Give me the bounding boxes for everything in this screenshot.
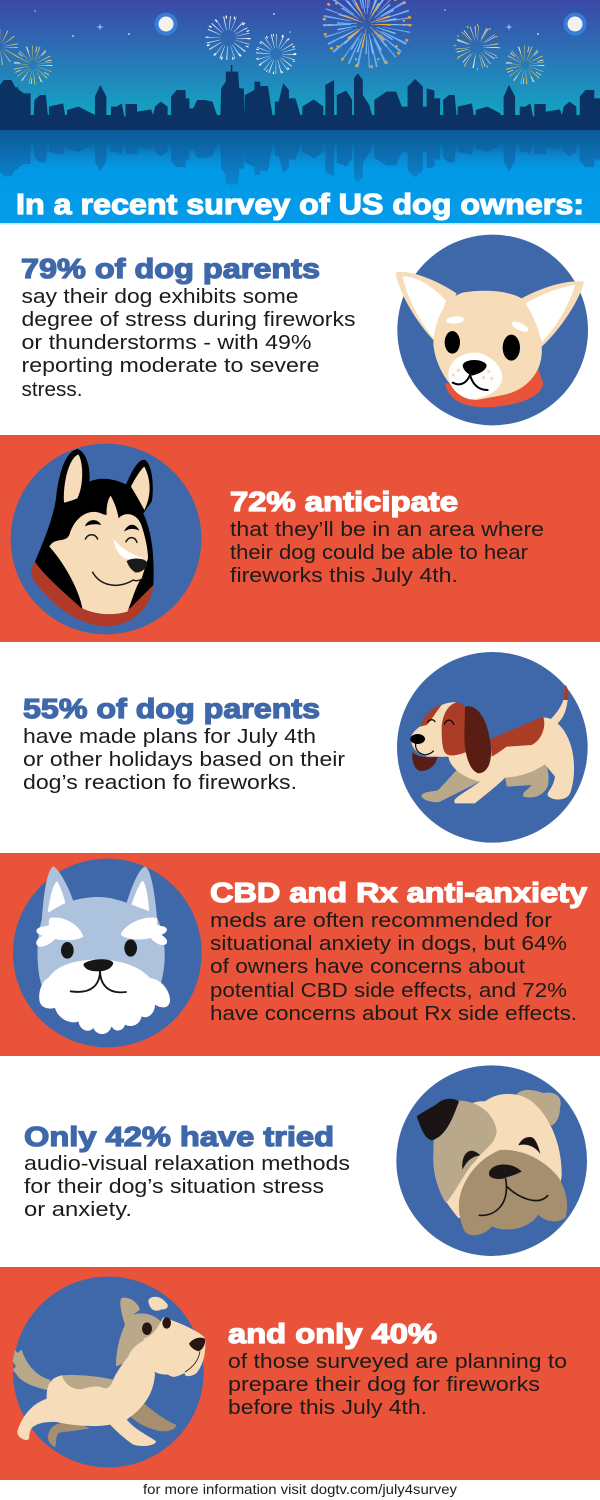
body text: or other holidays based on their (23, 748, 345, 771)
icon: beagle in circle (397, 652, 588, 843)
body text: or thunderstorms - with 49% (22, 331, 312, 354)
icon: husky in circle (11, 444, 201, 634)
icon: pug in circle (396, 1065, 587, 1256)
body text: potential CBD side effects, and 72% (210, 979, 567, 1002)
body text (210, 909, 577, 1025)
body text: before this July 4th. (228, 1396, 427, 1419)
body text: of those surveyed are planning to (228, 1350, 567, 1373)
firework: white one (207, 17, 249, 59)
body text: stress. (22, 378, 82, 401)
stat heading: and only 40% (228, 1318, 437, 1349)
panel: 55 percent plans (0, 642, 600, 853)
body text (23, 725, 345, 794)
body text: reporting moderate to severe (22, 354, 320, 377)
icon: schnauzer in circle (13, 859, 202, 1047)
body text: say their dog exhibits some (22, 285, 298, 308)
skyline reflection (0, 130, 600, 190)
panel: only 42 percent (0, 1056, 600, 1267)
panel: only 40 percent (0, 1267, 600, 1480)
skyline (0, 65, 600, 130)
firework: gold edge (0, 36, 11, 58)
stat heading: CBD and Rx anti-anxiety (210, 877, 587, 908)
body text (24, 1152, 350, 1221)
body text: have concerns about Rx side effects. (210, 1002, 577, 1025)
main title: In a recent survey of US dog owners: (16, 189, 584, 221)
icon: chihuahua in circle (396, 235, 588, 425)
body text: dog’s reaction fo fireworks. (23, 771, 297, 794)
panel: 72 percent anticipate (0, 435, 600, 642)
body text (230, 518, 544, 587)
body text: prepare their dog for fireworks (228, 1373, 540, 1396)
firework: large blue (324, 0, 410, 67)
body text: fireworks this July 4th. (230, 564, 458, 587)
firework: gold right (509, 49, 541, 81)
firework: gold and white (455, 25, 499, 69)
body text (22, 285, 356, 401)
firework: white two (257, 35, 295, 73)
panel: 79 percent stress (0, 224, 600, 435)
stat heading: Only 42% have tried (24, 1121, 334, 1152)
body text: their dog could be able to hear (230, 541, 528, 564)
body text (228, 1350, 567, 1419)
body text: degree of stress during fireworks (22, 308, 356, 331)
body text: that they’ll be in an area where (230, 518, 544, 541)
body text: audio-visual relaxation methods (24, 1152, 350, 1175)
body text: of owners have concerns about (210, 955, 525, 978)
stat heading: 79% of dog parents (21, 253, 320, 284)
stars (34, 9, 539, 37)
icon: terrier in circle (13, 1277, 205, 1467)
stat heading: 55% of dog parents (23, 693, 320, 724)
body text: for their dog’s situation stress (24, 1175, 324, 1198)
moon left (154, 12, 178, 36)
body text: or anxiety. (24, 1198, 132, 1221)
banner: city skyline with fireworks (0, 0, 600, 224)
body text: have made plans for July 4th (23, 725, 316, 748)
body text: situational anxiety in dogs, but 64% (210, 932, 567, 955)
stat heading: 72% anticipate (230, 486, 458, 517)
footer source line: for more information visit dogtv.com/july4survey (143, 1482, 457, 1497)
moon right (564, 12, 586, 36)
body text: meds are often recommended for (210, 909, 552, 932)
panel: CBD and Rx (0, 853, 600, 1056)
firework: gold left (17, 49, 49, 81)
